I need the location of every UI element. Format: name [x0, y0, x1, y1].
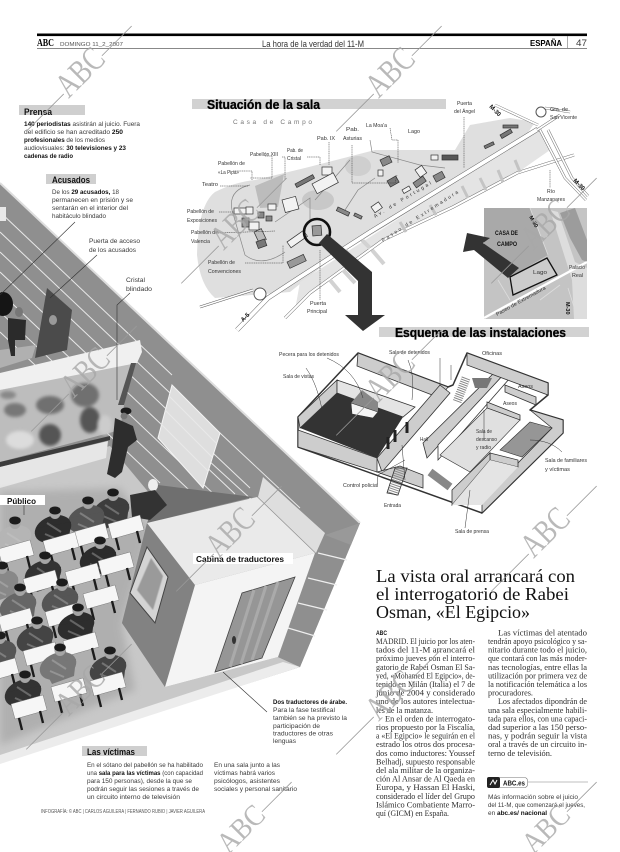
heading: Situación de la sala: Situación de la sala [207, 97, 321, 112]
article column 1: junio de 2004 y considerado [375, 689, 475, 698]
text block: 140 periodistas asistirán al juicio. Fuera [24, 121, 140, 128]
article column 1: dos como inductores: Youssef [376, 749, 475, 758]
map leader lines [218, 117, 550, 300]
section and page: 47 [576, 38, 587, 48]
schema labels: Hall [420, 437, 428, 443]
map labels: Convenciones [208, 269, 241, 275]
article column 2: nas tecnologías, entre ellas la [488, 663, 587, 672]
map labels: M-30 [488, 104, 502, 119]
stairs [387, 378, 492, 495]
article column 1: En el orden de interrogato- [385, 714, 475, 723]
article column 1: quí (GICM) en España. [376, 809, 449, 818]
web note: Más información sobre el juicio [488, 794, 578, 801]
schema labels: Pecera para los detenidos [279, 352, 339, 358]
arrow: map to schema [319, 234, 385, 331]
schema labels: Control policial [343, 483, 378, 489]
map labels: Principal [307, 309, 327, 315]
ABC.es box: ABC.es [503, 780, 525, 788]
map labels: San Vicente [550, 115, 577, 121]
text column 1: En el sótano del pabellón se ha habilitado [87, 762, 203, 769]
floor [0, 446, 300, 762]
parkland block between roads [295, 129, 550, 310]
locator circle [304, 219, 330, 245]
leader line: acusados [0, 222, 267, 712]
map labels: Teatro [202, 182, 218, 188]
inset labels: Paseo de Extremadura [495, 285, 547, 318]
article column 2: una sala especialmente habili- [488, 706, 587, 715]
map labels: Pabellón de [218, 161, 245, 167]
right side wall panels [278, 523, 360, 667]
green area [255, 174, 284, 208]
inset locator rectangle [510, 258, 557, 295]
text block: profesionales de los medios [24, 137, 106, 144]
map labels: «La Pipa» [218, 170, 239, 176]
article headline: el interrogatorio de Rabei [376, 584, 569, 604]
illustration: courtroom cutaway [0, 183, 360, 764]
schema leader lines [306, 358, 562, 528]
article column 1: estrado los otros dos procesa- [376, 740, 475, 749]
doors [388, 422, 407, 449]
text column 2: En una sala junto a las [214, 762, 281, 769]
text column 2: víctimas habrá varios [214, 770, 276, 777]
article column 1: ción Al Ansar de Al Qaeda en [376, 775, 475, 784]
article column 2: procuradores. [488, 689, 533, 698]
text block: permanecen en prisión y se [52, 197, 133, 204]
blocks along avenue [400, 160, 520, 232]
text: dos traductores [273, 699, 347, 745]
map labels: Puerta [310, 301, 327, 307]
text block: De los 29 acusados, 18 [52, 189, 119, 196]
inset labels [495, 215, 585, 318]
map labels: del Ángel [454, 108, 475, 115]
translators' booth [122, 497, 315, 687]
inset labels: M-30 [527, 215, 539, 229]
newspaper name and date: ABC [37, 38, 54, 49]
building silhouette [298, 353, 563, 513]
article column 1: uno de los autores intelectua- [376, 697, 475, 706]
text: dos traductores: Para la fase testifical [273, 707, 336, 714]
dark door of the defendants [35, 288, 72, 358]
map labels: Pabellón de [191, 230, 218, 236]
article column 1: próximo jueves con el interro- [376, 654, 475, 663]
article column 2 [488, 628, 587, 758]
schema labels [279, 350, 587, 535]
text block: del edificio se han acreditado 250 [24, 129, 123, 136]
article column 1: a «El Egipcio» le seguirán en el [376, 732, 476, 741]
schema labels: y víctimas [545, 467, 570, 473]
article headline: La vista oral arrancará con [376, 566, 575, 586]
map labels: Pab. IX [317, 136, 335, 142]
label: cristal blindado: Cristal [126, 277, 146, 284]
public seats and people [0, 479, 167, 745]
pecera [351, 390, 378, 418]
walls [298, 353, 563, 513]
glass panel on wall [158, 385, 220, 488]
article column 2: la notificación telemática a los [488, 680, 587, 689]
seated defendant [8, 307, 26, 356]
article headline [376, 566, 575, 622]
article column 2: que contará con las más moder- [488, 654, 587, 663]
schema labels: y radio [476, 445, 491, 451]
map labels: Casa de Campo [233, 119, 312, 126]
label: cristal blindado: blindado [126, 286, 152, 293]
map labels: Valencia [191, 239, 211, 245]
article column 1: gatorio de Rabei Osman El Sa- [376, 663, 475, 672]
text: dos traductores: también se ha previsto la [273, 715, 347, 722]
schema labels: Sala de prensa [455, 529, 490, 535]
text column 2: psicólogos, asistentes [214, 778, 281, 785]
panel: Acusados: Acusados [52, 175, 90, 185]
heading: Situación de la sala [192, 97, 446, 112]
map land [197, 118, 535, 298]
text block: habitáculo blindado [52, 213, 106, 220]
text block [24, 121, 140, 160]
article column 1: del ala militar de la organiza- [376, 766, 475, 775]
buildings [234, 125, 518, 268]
label: cristal blindado [126, 277, 152, 293]
article column 1: Islámico Combatiente Marro- [376, 800, 475, 809]
icon: globe hand [490, 780, 497, 785]
map labels: Pabellón de [208, 260, 235, 266]
booth door [215, 577, 295, 672]
map labels: Cristal [287, 156, 301, 162]
map labels: La Moa'a [366, 123, 388, 129]
sala de descanso floor [440, 408, 520, 472]
text block: audiovisuales: 30 televisiones y 23 [24, 145, 126, 152]
map labels: M-30 [572, 178, 586, 193]
text block: cadenas de radio [24, 153, 73, 160]
glass panel behind booth [258, 477, 325, 553]
guard [107, 408, 137, 478]
map labels: Pab. de [287, 148, 303, 154]
map labels: A-5 [240, 312, 252, 323]
label: Cabina de traductores: Cabina de traductores [196, 554, 284, 564]
map labels: Av. de Portugal [373, 181, 433, 220]
article column 1: MADRID. El juicio por los aten- [376, 637, 475, 646]
article headline: Osman, «El Egipcio» [376, 602, 530, 622]
article column 1: yed, «Mohamed El Egipcio», de- [376, 671, 475, 680]
inset labels: Lago [533, 270, 547, 276]
article column 2: nas, y podrán seguir la vista [488, 732, 587, 741]
text: dos traductores: Dos traductores de árabe. [273, 699, 347, 706]
web note [488, 794, 585, 817]
inset map [463, 208, 587, 319]
ABC.es box [487, 777, 588, 788]
panel: Las víctimas: Las víctimas [87, 747, 135, 757]
map labels: Puerta [457, 101, 473, 107]
schema labels: Entrada [384, 503, 402, 509]
schema labels: Aseos [518, 384, 533, 390]
inset labels: CASA DE [495, 231, 518, 237]
text: dos traductores: traductores de otras [273, 730, 334, 738]
schema labels: Sala de vistas [283, 374, 314, 380]
defendants' room [0, 207, 72, 368]
label: puerta de acceso [89, 238, 140, 254]
article column 1: tados del 11-M arrancará el [376, 646, 476, 655]
roads [200, 105, 588, 330]
label: Público: Público [7, 496, 36, 506]
schema labels: Sala de [476, 429, 492, 435]
article column 2: tada para ellos, con una capaci- [488, 714, 587, 723]
schema labels: Sala de detenidos [389, 350, 430, 356]
article column 2: dad superior a las 150 perso- [488, 723, 587, 732]
section and page: ESPAÑA [530, 38, 562, 48]
map labels: Asturias [343, 136, 362, 142]
map labels: Pab. [346, 127, 359, 133]
map labels: Paseo de Extremadura [381, 190, 460, 244]
text: dos traductores: lenguas [273, 738, 297, 745]
text column 2 [214, 762, 297, 793]
armoured glass cage [0, 340, 142, 488]
map labels [187, 101, 586, 323]
panel: Acusados [46, 174, 133, 220]
schema labels: Sala de familiares [545, 458, 587, 464]
web note: del 11-M, que comenzará el jueves, [488, 802, 585, 809]
section title: La hora de la verdad del 11-M [262, 39, 364, 49]
panel: Prensa: Prensa [24, 107, 53, 117]
article column 2: utilización por primera vez de [488, 671, 587, 680]
article column 2: oral a través de un circuito in- [488, 740, 587, 749]
article column 1: Europa, y Hassan El Haski, [376, 783, 475, 792]
web note: en abc.es/ nacional [488, 810, 547, 817]
schema labels: Oficinas [482, 351, 502, 357]
room wall with stripes [0, 183, 360, 762]
article column 1 [375, 631, 476, 818]
inset labels: Palacio [569, 265, 585, 271]
text block: sentarán en el interior del [52, 205, 129, 212]
schema labels: Aseos [503, 401, 517, 407]
credit: INFOGRAFÍA: © ABC | CARLOS AGUILERA | FERNANDO RUBIO | JAVIER AGUILERA [41, 808, 206, 815]
label: puerta de acceso: de los acusados [89, 247, 137, 254]
floor plan schema [279, 350, 587, 535]
map labels: Lago [408, 129, 420, 135]
newspaper name and date [37, 38, 123, 49]
text column 1: una sala para las víctimas (con capacidad [87, 770, 203, 777]
inset arrow [463, 233, 519, 278]
map [187, 101, 588, 330]
article column 1: considerado el líder del Grupo [376, 792, 475, 801]
text column 2: sociales y personal sanitario [214, 786, 297, 793]
article column 2: Los afectados dipondrán de [498, 697, 587, 706]
label: puerta de acceso: Puerta de acceso [89, 238, 140, 245]
article column 2: nitario durante todo el juicio, [488, 646, 587, 655]
panel: Prensa [19, 105, 140, 160]
article column 2: Las víctimas del atentado [498, 628, 587, 637]
text column 1: podrán seguir las sesiones a través de [87, 786, 199, 793]
label: Público [0, 495, 45, 506]
heading: Esquema de las instalaciones: Esquema de las instalaciones [395, 325, 566, 340]
article column 1: les de la matanza. [376, 706, 433, 715]
map labels: Pabellón XIII [250, 152, 278, 158]
map labels: Río [547, 189, 555, 195]
panel: Las víctimas [82, 746, 297, 801]
section and page [530, 38, 587, 48]
schema labels: descanso [476, 437, 497, 443]
inset labels: M-30 [564, 302, 570, 315]
text: dos traductores: participación de [273, 723, 320, 730]
text column 1: un circuito interno de televisión [87, 794, 180, 801]
article column 1: tenido en Milán (Italia) el 7 de [376, 680, 475, 689]
inset labels: CAMPO [497, 242, 517, 248]
map labels: Gta. de [550, 107, 568, 113]
article column 2: tendrán apoyo psicológico y sa- [488, 637, 587, 646]
map labels: Pabellón de [187, 209, 214, 215]
map labels: Exposiciones [187, 218, 217, 224]
sala de vistas floor [300, 393, 403, 458]
article column 1: rios propuesto por la Fiscalía, [376, 723, 475, 732]
sala de prensa floor [452, 460, 518, 505]
sala de familiares floor [500, 422, 552, 457]
map labels: Manzanares [537, 197, 565, 203]
article column 1: Belhadj, supuesto responsable [376, 757, 475, 766]
text column 1 [87, 762, 203, 801]
inset labels: Real [572, 273, 583, 279]
article column 1: ABC [376, 631, 388, 637]
page header [37, 34, 587, 49]
text column 1: para 150 personas), desde la que se [87, 778, 192, 785]
text block [52, 189, 133, 220]
newspaper name and date: DOMINGO 11_2_2007 [60, 42, 123, 48]
article column 2: terno de televisión. [488, 749, 552, 758]
